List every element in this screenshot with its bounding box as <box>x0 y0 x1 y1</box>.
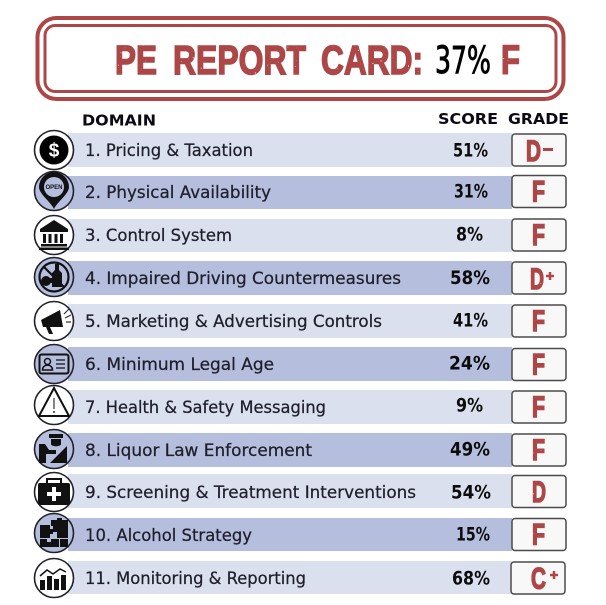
row 3: control system <box>34 216 566 254</box>
title banner <box>38 18 564 99</box>
domain label 1: 1. Pricing & Taxation <box>85 141 253 160</box>
title text: REPORT <box>173 37 306 83</box>
banner double frame <box>38 18 564 99</box>
grade F: F <box>532 434 545 467</box>
icon: first aid kit <box>34 472 74 512</box>
grade F <box>512 348 566 382</box>
row 1: pricing and taxation <box>34 130 566 170</box>
header: domain: DOMAIN <box>82 112 156 130</box>
grade D: D <box>532 476 546 509</box>
domain label 3: 3. Control System <box>85 226 232 245</box>
score 31%: 31% <box>454 180 488 202</box>
domain label 9: 9. Screening & Treatment Interventions <box>85 483 416 502</box>
grade F <box>512 219 566 252</box>
domain label 6: 6. Minimum Legal Age <box>85 355 274 374</box>
row 11: monitoring and reporting <box>34 558 565 598</box>
row 8: liquor law enforcement <box>34 430 566 468</box>
score 15%: 15% <box>456 524 490 546</box>
header: grade: GRADE <box>508 110 569 128</box>
icon: open map pin: OPEN <box>45 185 63 191</box>
score 58%: 58% <box>450 267 490 289</box>
grade F <box>512 176 566 208</box>
grade D+ <box>512 262 566 296</box>
grade F <box>512 434 566 467</box>
domain label 2: 2. Physical Availability <box>85 183 271 202</box>
icon: warning triangle <box>34 386 74 424</box>
grade F <box>512 391 566 424</box>
icon: dollar coin <box>34 130 74 170</box>
icon: puzzle pieces <box>34 514 74 552</box>
score 49%: 49% <box>450 438 490 460</box>
overall score: 37% <box>435 39 491 82</box>
icon: dollar coin: $ <box>49 140 60 162</box>
icon: government building <box>34 216 74 254</box>
overall grade: F <box>501 37 520 83</box>
grade F: F <box>532 219 545 252</box>
grade C+ <box>511 562 565 596</box>
domain label 4: 4. Impaired Driving Countermeasures <box>85 269 401 288</box>
grade F: F <box>532 518 545 552</box>
icon: megaphone <box>34 302 74 340</box>
domain label 7: 7. Health & Safety Messaging <box>85 398 326 417</box>
title text: PE <box>115 37 157 83</box>
row 7: health and safety messaging <box>34 386 566 424</box>
grade F: F <box>532 348 545 382</box>
grade F: F <box>532 176 545 208</box>
grade F <box>512 305 566 338</box>
domain label 8: 8. Liquor Law Enforcement <box>85 441 313 460</box>
grade F <box>512 518 566 552</box>
score 8%: 8% <box>456 224 483 246</box>
row 9: screening and treatment interventions <box>34 472 566 512</box>
domain label 10: 10. Alcohol Strategy <box>85 526 252 545</box>
grade D-: D <box>526 135 541 168</box>
score 41%: 41% <box>453 310 488 332</box>
grade D- <box>512 134 566 168</box>
row 6: minimum legal age <box>34 344 566 384</box>
row 2: physical availability <box>34 172 566 210</box>
icon: open map pin <box>34 172 74 210</box>
score 9%: 9% <box>456 394 483 416</box>
grade F: F <box>532 305 545 338</box>
header: score: SCORE <box>438 110 498 128</box>
icon: id card <box>34 344 74 384</box>
score 54%: 54% <box>451 482 491 504</box>
icon: enforcement officer <box>34 430 74 468</box>
score 51%: 51% <box>453 140 488 162</box>
grade D+: D <box>530 263 544 296</box>
score 24%: 24% <box>449 352 490 374</box>
grade D <box>512 476 566 509</box>
column headers <box>82 110 569 130</box>
grade F: F <box>532 391 545 424</box>
score 68%: 68% <box>452 568 490 590</box>
title text <box>115 37 423 83</box>
domain label 5: 5. Marketing & Advertising Controls <box>85 312 382 331</box>
domain label 11: 11. Monitoring & Reporting <box>85 569 306 588</box>
title text: CARD: <box>321 37 423 83</box>
grade C+: C <box>531 562 546 596</box>
icon: rising bar chart <box>34 558 74 598</box>
row 10: alcohol strategy <box>34 514 566 552</box>
row 5: marketing and advertising controls <box>34 302 566 340</box>
icon: no drink and drive <box>34 258 74 296</box>
row 4: impaired driving countermeasures <box>34 258 566 296</box>
